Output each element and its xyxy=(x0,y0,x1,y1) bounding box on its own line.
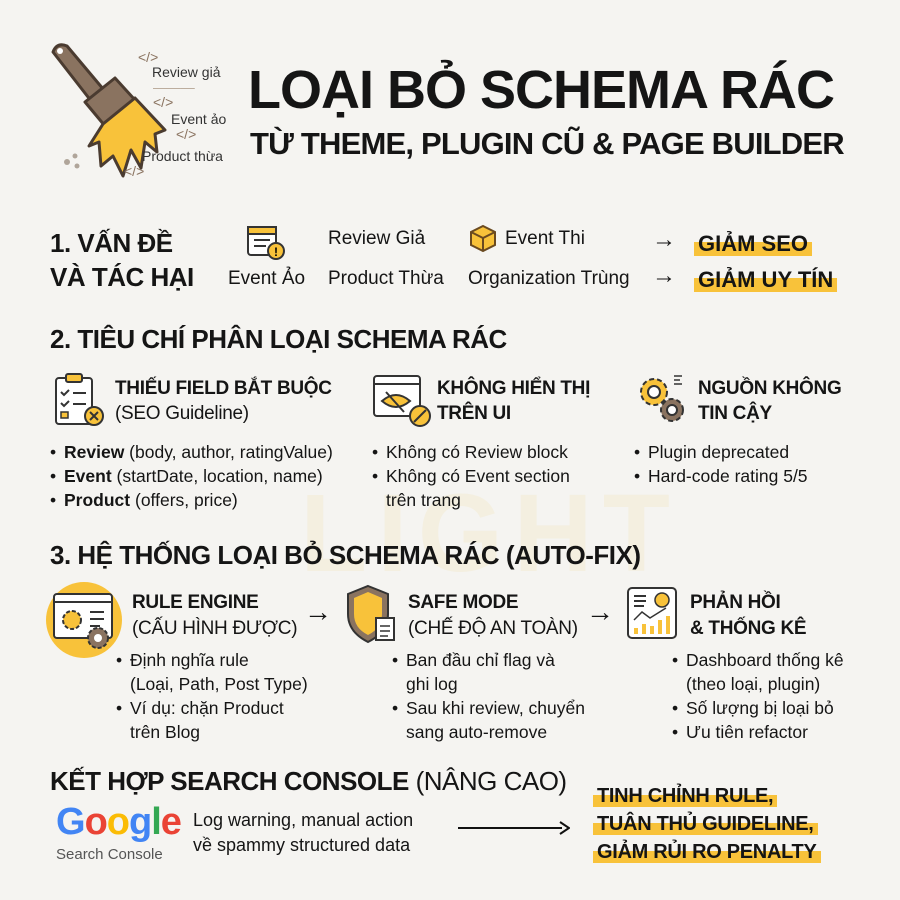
bullets: Sau khi review, chuyển xyxy=(406,698,585,718)
bullets: trên trang xyxy=(386,490,461,510)
bullets xyxy=(116,650,308,742)
text: </> xyxy=(124,163,144,179)
text: Product Thừa xyxy=(328,268,444,289)
bullets: trên Blog xyxy=(130,722,200,742)
bullets: (theo loại, plugin) xyxy=(686,674,820,694)
subtitle: TỪ THEME, PLUGIN CŨ & PAGE BUILDER xyxy=(250,126,844,161)
bullets: Event (startDate, location, name) xyxy=(64,466,323,486)
icon: calendar: ! xyxy=(274,245,278,259)
outcomes: GIẢM RỦI RO PENALTY xyxy=(597,841,816,863)
icon: google search console logo: Search Console xyxy=(56,846,163,863)
icon: broom xyxy=(52,43,167,178)
bullets xyxy=(634,442,808,486)
icon: gears xyxy=(640,375,684,422)
title: TRÊN UI xyxy=(437,403,511,424)
section 1 heading xyxy=(50,228,194,292)
icon: google search console logo: Google xyxy=(56,801,181,843)
section 4 heading: KẾT HỢP SEARCH CONSOLE (NÂNG CAO) xyxy=(50,766,567,796)
bullets: Số lượng bị loại bỏ xyxy=(686,698,834,718)
problem items: Review Giả xyxy=(328,228,425,249)
panel: untrusted source xyxy=(634,375,841,486)
title: (CẤU HÌNH ĐƯỢC) xyxy=(132,618,297,639)
title: TIN CẬY xyxy=(698,403,772,424)
bullets: Ưu tiên refactor xyxy=(686,722,808,742)
title: SAFE MODE xyxy=(408,592,518,613)
title xyxy=(408,592,578,639)
bullets xyxy=(672,650,844,742)
title xyxy=(437,376,590,424)
section 3 heading: 3. HỆ THỐNG LOẠI BỎ SCHEMA RÁC (AUTO-FIX) xyxy=(50,540,640,570)
text: log warning: Log warning, manual action xyxy=(193,810,413,830)
broom labels: Review giả xyxy=(152,64,220,80)
title: & THỐNG KÊ xyxy=(690,618,806,639)
broom labels: Event ảo xyxy=(171,111,226,127)
title xyxy=(132,592,297,639)
title: (SEO Guideline) xyxy=(115,403,249,424)
title: PHẢN HỒI xyxy=(690,592,780,613)
broom labels: Product thừa xyxy=(142,148,223,164)
icon: calendar xyxy=(247,226,285,260)
title xyxy=(690,590,806,639)
arrows and effects: → xyxy=(652,262,676,289)
bullets: Plugin deprecated xyxy=(648,442,789,462)
title: NGUỒN KHÔNG xyxy=(698,378,841,399)
text: Organization Trùng xyxy=(468,268,630,289)
arrow xyxy=(458,821,570,835)
icon: hidden eye window xyxy=(373,375,431,427)
watermark: LIGHT xyxy=(300,472,680,595)
text: log warning: về spammy structured data xyxy=(193,835,410,855)
text: GIẢM UY TÍN xyxy=(698,267,833,292)
bullets: Dashboard thống kê xyxy=(686,650,844,670)
text: GIẢM SEO xyxy=(698,231,808,256)
broom labels: </> xyxy=(153,94,173,110)
broom labels: </> xyxy=(138,49,158,65)
title xyxy=(698,376,841,424)
broom labels: — — — xyxy=(153,79,193,95)
icon: dashboard xyxy=(627,587,677,639)
outcomes xyxy=(593,784,821,863)
title: LOẠI BỎ SCHEMA RÁC xyxy=(248,60,834,120)
icon: box xyxy=(470,224,496,252)
bullets xyxy=(50,442,333,510)
broom labels xyxy=(124,49,226,179)
bullets: Review (body, author, ratingValue) xyxy=(64,442,333,462)
icon: checklist xyxy=(55,373,104,426)
text: log warning xyxy=(193,810,413,855)
bullets: sang auto-remove xyxy=(406,722,547,742)
bullets: (Loại, Path, Post Type) xyxy=(130,674,308,694)
section 1 heading: 1. VẤN ĐỀ xyxy=(50,228,173,258)
panel: rule engine xyxy=(46,582,308,742)
bullets: Định nghĩa rule xyxy=(130,650,249,670)
broom labels: </> xyxy=(176,126,196,142)
icon: rule engine xyxy=(46,582,122,658)
arrows and effects: → xyxy=(652,226,676,253)
outcomes: TINH CHỈNH RULE, xyxy=(597,785,773,807)
panel: feedback xyxy=(627,587,844,742)
bullets: Không có Review block xyxy=(386,442,568,462)
bullets xyxy=(392,650,585,742)
bullets: Ví dụ: chặn Product xyxy=(130,698,284,718)
title: KHÔNG HIỂN THỊ xyxy=(437,378,590,399)
panel: not shown on UI xyxy=(372,375,590,510)
bullets: Không có Event section xyxy=(386,466,570,486)
title: THIẾU FIELD BẮT BUỘC xyxy=(115,378,332,399)
bullets: Product (offers, price) xyxy=(64,490,238,510)
icon: shield xyxy=(347,584,395,644)
arrow: → xyxy=(304,596,332,627)
section 2 heading: 2. TIÊU CHÍ PHÂN LOẠI SCHEMA RÁC xyxy=(50,324,507,354)
section 1 heading: VÀ TÁC HẠI xyxy=(50,262,194,292)
bullets: ghi log xyxy=(406,674,458,694)
outcomes: TUÂN THỦ GUIDELINE, xyxy=(597,813,814,835)
bullets: Hard-code rating 5/5 xyxy=(648,466,808,486)
arrow: → xyxy=(586,596,614,627)
text: Event Ảo xyxy=(228,268,305,289)
bullets: Ban đầu chỉ flag và xyxy=(406,650,555,670)
title: RULE ENGINE xyxy=(132,592,259,613)
panel: missing fields xyxy=(50,373,333,510)
icon: google search console logo xyxy=(56,801,181,863)
arrows and effects xyxy=(652,226,676,289)
bullets xyxy=(372,442,570,510)
title xyxy=(115,376,332,424)
title: (CHẾ ĐỘ AN TOÀN) xyxy=(408,618,578,639)
text: Event Thi xyxy=(505,228,585,249)
panel: safe mode xyxy=(347,584,585,742)
